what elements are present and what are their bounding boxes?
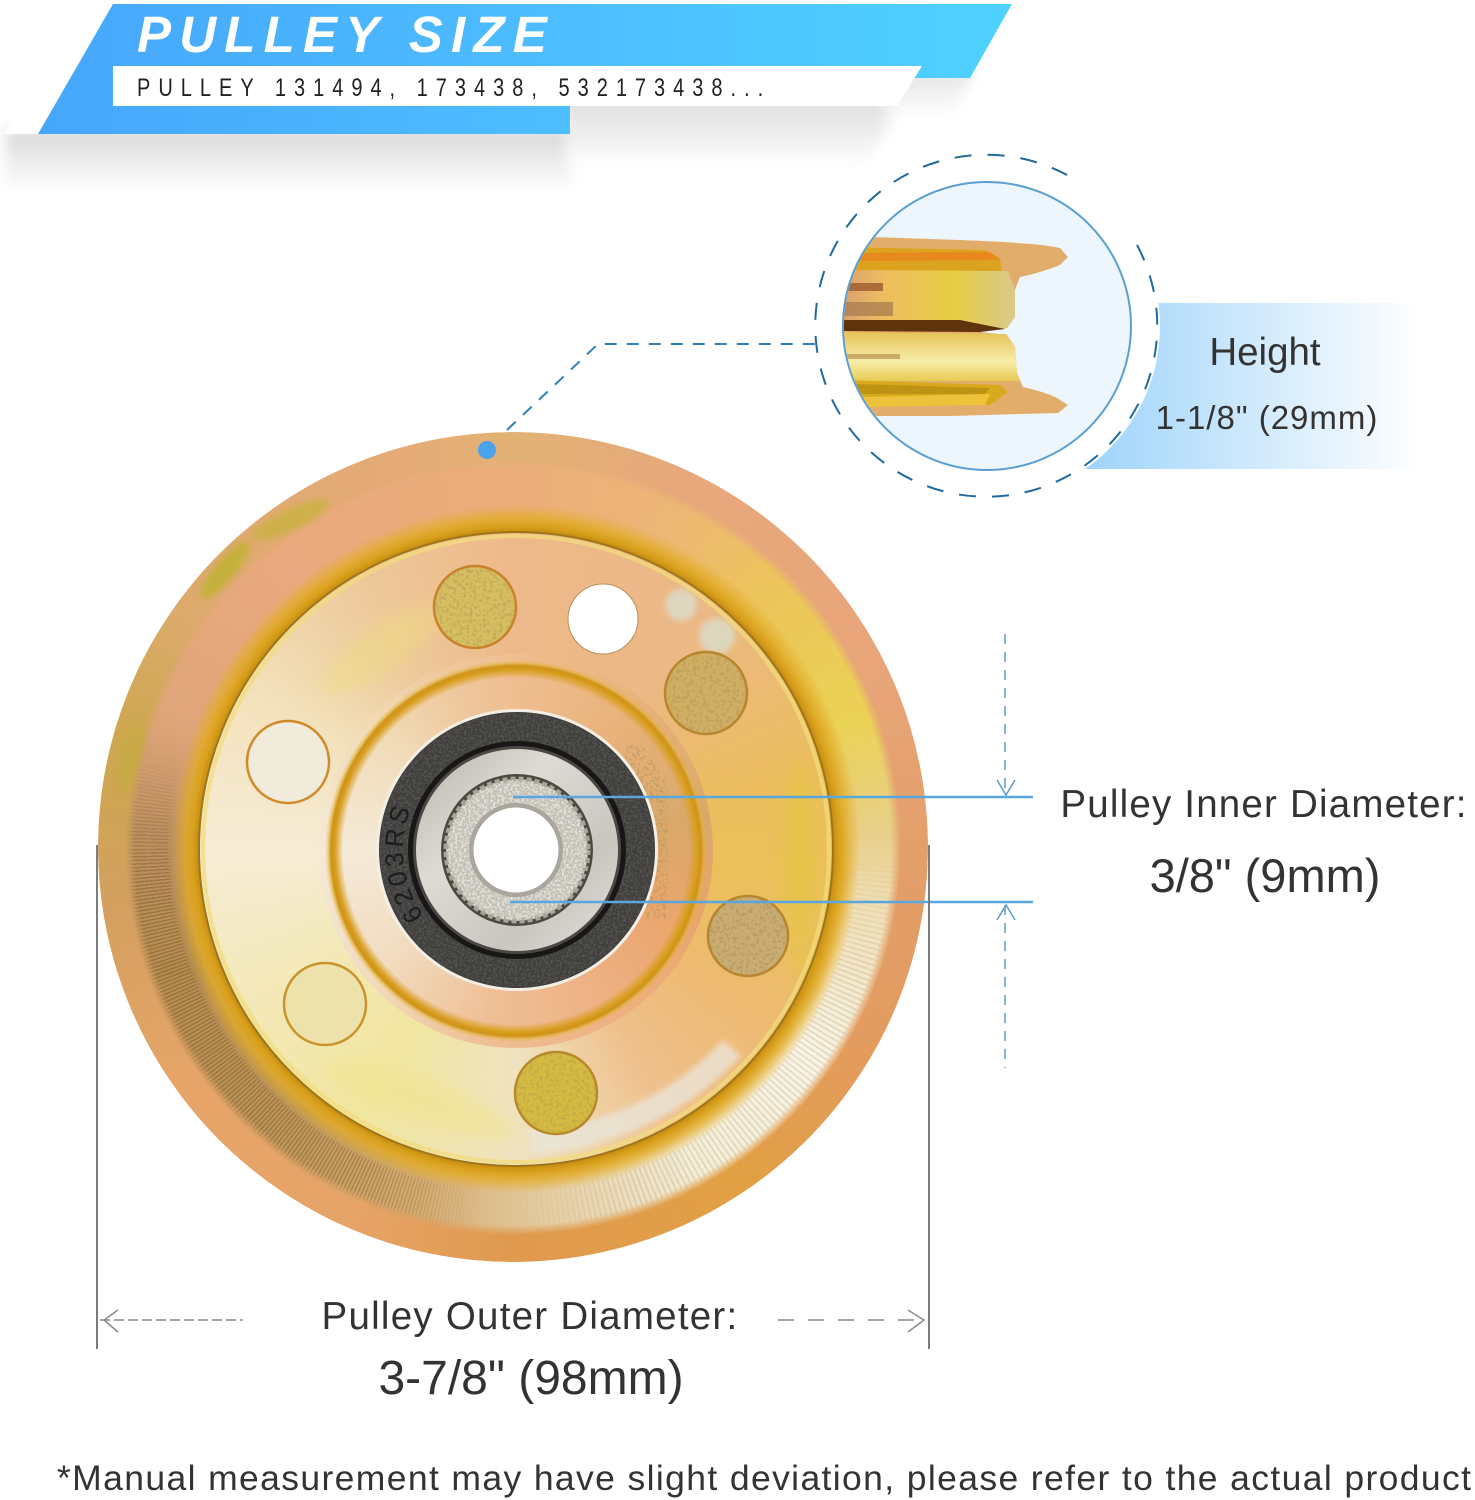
height label panel: Height [1209, 331, 1321, 374]
hub [319, 654, 713, 1048]
arrow: bottom [997, 905, 1015, 1068]
bearing [376, 709, 658, 991]
hub texture, right [625, 745, 667, 920]
inner diameter lines [510, 634, 1033, 1068]
inner diameter label [1060, 783, 1468, 902]
plate edge line [199, 532, 833, 1166]
flange band [128, 467, 900, 1234]
height label panel: 1-1/8" (29mm) [1156, 399, 1378, 436]
subtitle bar: PULLEY 131494, 173438, 532173438... [137, 74, 771, 102]
outer diameter label: Pulley Outer Diameter: [322, 1295, 738, 1338]
inner diameter label: 3/8" (9mm) [1150, 849, 1380, 902]
height label panel [812, 152, 1422, 500]
arrow: right [778, 1310, 925, 1332]
banner [4, 4, 1012, 134]
footnote: *Manual measurement may have slight deviation, please refer to the actual product [57, 1458, 1472, 1498]
dashed leader line to inset [507, 344, 816, 430]
outer diameter dimension [97, 845, 929, 1349]
subtitle bar [113, 66, 922, 106]
icon: through hole [568, 584, 638, 654]
rivets [247, 566, 788, 1134]
bearing marking: 6203RS [385, 806, 421, 922]
golden groove [98, 432, 928, 1262]
leader dot [478, 441, 496, 459]
inner plate [199, 532, 833, 1166]
arrow: left [100, 1310, 243, 1332]
inset: pulley side view [815, 155, 1157, 497]
outer diameter label: 3-7/8" (98mm) [378, 1352, 684, 1405]
arrow: top [997, 634, 1015, 795]
outer rim [98, 432, 928, 1262]
machined streaks, lower right [569, 898, 887, 1220]
pulley surface details [111, 492, 833, 1166]
banner shadow [6, 70, 975, 192]
pulley wheel body [98, 432, 928, 1262]
machined streaks, lower left [130, 780, 456, 1220]
inner diameter label: Pulley Inner Diameter: [1060, 783, 1468, 826]
outer diameter label [322, 1295, 738, 1405]
heading: PULLEY SIZE [137, 6, 555, 63]
